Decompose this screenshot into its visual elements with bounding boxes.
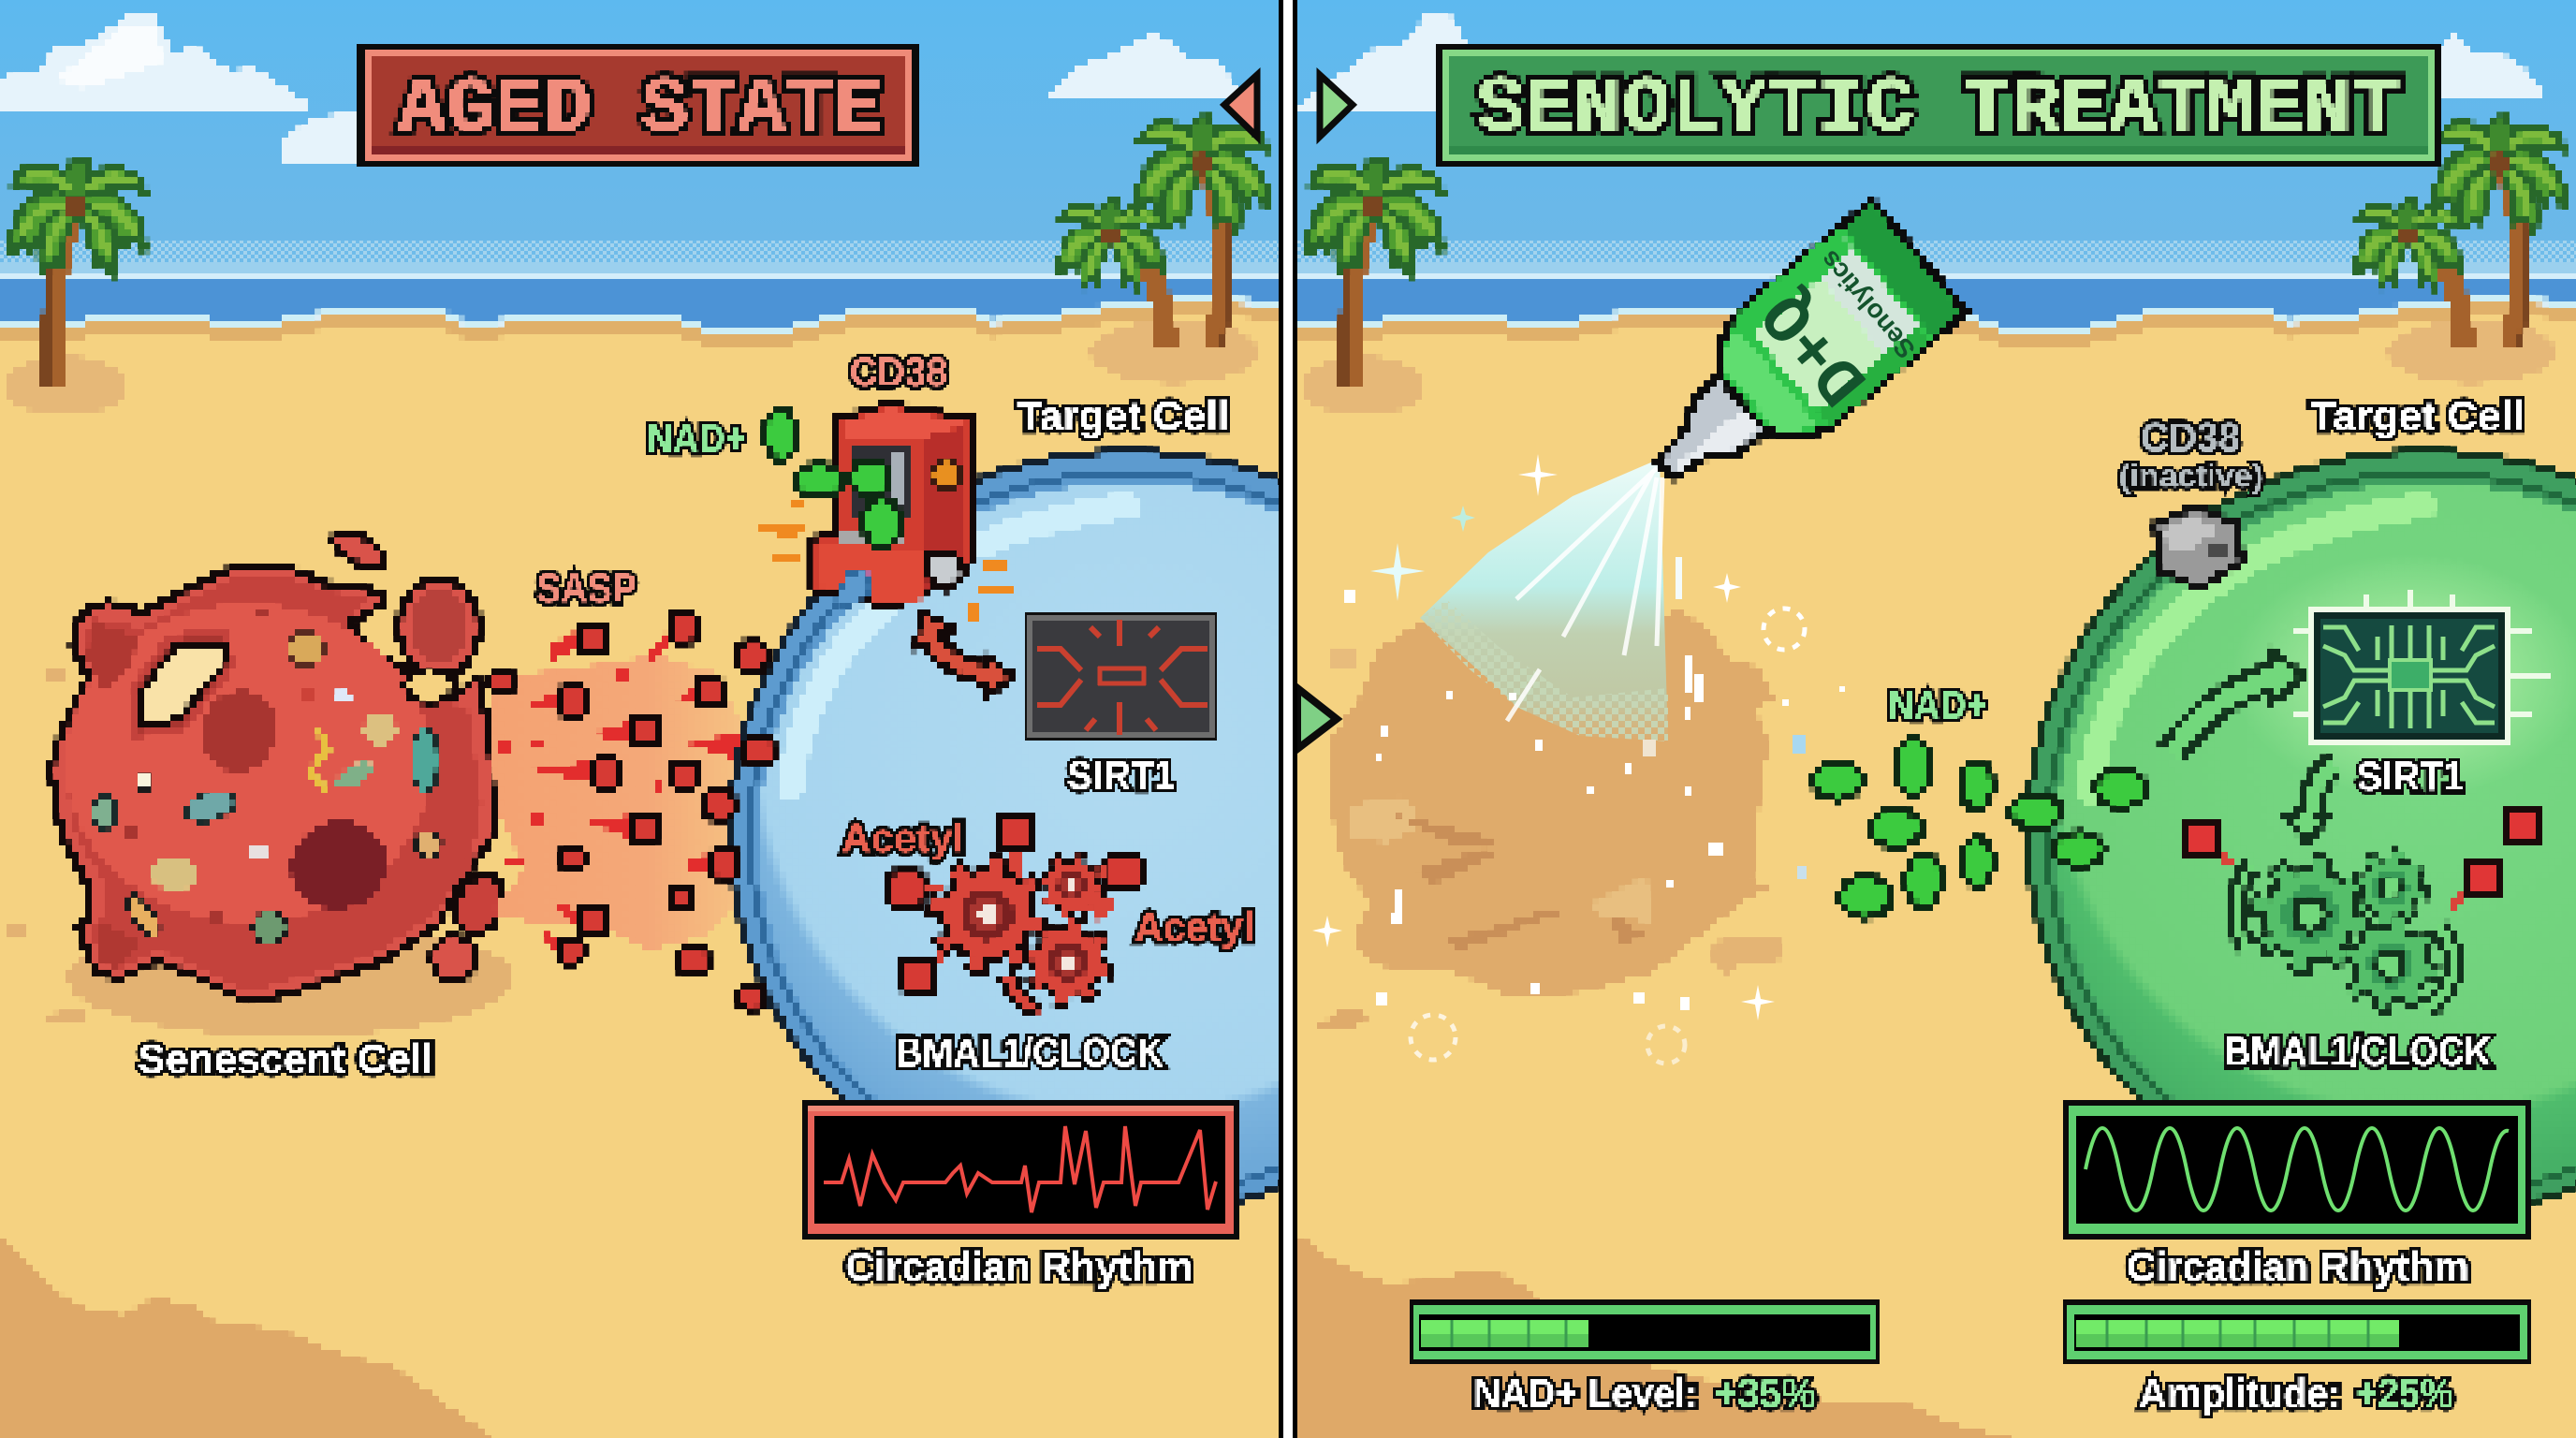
activation arrows: [2172, 653, 2335, 843]
damaged BMAL1/CLOCK gears: [890, 816, 1141, 1011]
title: aged state: AGED STATE: [398, 66, 883, 154]
dissolved senescent cell residue: [1310, 606, 1780, 1030]
panel divider: [1279, 0, 1297, 1438]
title: aged state: [357, 44, 919, 167]
beach background: [1297, 0, 2576, 1438]
label: Acetyl right: Acetyl: [1134, 904, 1254, 950]
target cell: healthy: [2027, 451, 2576, 1215]
arrow: right pointer: [1320, 75, 1353, 137]
circadian rhythm monitor: restored: [2063, 1100, 2531, 1240]
label: Target Cell: Target Cell: [2310, 393, 2525, 439]
text labels: senolytic treatment: [1473, 393, 2525, 1416]
label: Circadian Rhythm: Circadian Rhythm: [2127, 1244, 2469, 1290]
label: BMAL1/CLOCK: BMAL1/CLOCK: [2224, 1029, 2491, 1075]
clouds: [1297, 16, 2544, 112]
label: SIRT1: SIRT1: [2357, 754, 2464, 800]
SASP cloud and particles: [491, 629, 740, 950]
arrow: left pointer: [1224, 75, 1257, 137]
label: Senescent Cell: Senescent Cell: [138, 1036, 433, 1082]
NAD+ gems: [1813, 740, 2146, 917]
NAD+ level progress bar: [1410, 1299, 1880, 1364]
SIRT1 chip: active: [2232, 554, 2576, 798]
clouds: [0, 16, 1259, 161]
green NAD+ gems in machine: [765, 409, 900, 547]
spray cone: [1420, 459, 1668, 741]
label: CD38: CD38: [850, 349, 947, 395]
curved double arrow: [916, 611, 1014, 697]
CD38 vending machine: [812, 404, 971, 609]
bottle: D+Q senolytics: Senolytics: [1814, 245, 1921, 364]
sparkle rings: [1411, 609, 1805, 1064]
circadian rhythm monitor: disrupted: [802, 1100, 1239, 1240]
bottle: D+Q senolytics: D+Q: [1748, 276, 1884, 418]
beach background: [0, 0, 1279, 413]
SIRT1 chip: damaged: [1025, 612, 1217, 741]
bottle: D+Q senolytics: [1618, 200, 1966, 525]
SASP particle squares: [490, 614, 773, 1009]
sparkles: [1312, 454, 1845, 1020]
label: NAD+: NAD+: [647, 416, 746, 462]
label: SASP: SASP: [536, 565, 637, 611]
healthy BMAL1/CLOCK gears: [2187, 807, 2538, 1009]
label: Target Cell: Target Cell: [1017, 393, 1229, 439]
label: Amplitude: Amplitude:: [2139, 1371, 2341, 1416]
sand dune: [0, 1236, 505, 1438]
senescent cell: [6, 524, 513, 1036]
label: CD38 inactive: CD38: [2141, 415, 2240, 461]
panel: aged state: [0, 0, 1279, 1438]
title: senolytic treatment: [1436, 44, 2441, 167]
inactive CD38 rock: [2155, 506, 2242, 588]
amplitude progress bar: [2063, 1299, 2531, 1364]
orange sparks: [758, 500, 1014, 622]
label: inactive: (inactive): [2119, 459, 2263, 494]
label: NAD+ Level: NAD+ Level:: [1473, 1371, 1698, 1416]
label: BMAL1/CLOCK: BMAL1/CLOCK: [896, 1030, 1164, 1076]
value: +35%: +35%: [1715, 1371, 1816, 1416]
sand dune: [1297, 1234, 2022, 1438]
label: NAD+: NAD+: [1888, 682, 1987, 728]
title: senolytic treatment: SENOLYTIC TREATMENT: [1476, 66, 2401, 154]
arrow: treatment pointer: [1297, 688, 1337, 749]
text labels: aged state: [138, 349, 1254, 1290]
label: Circadian Rhythm: Circadian Rhythm: [845, 1244, 1193, 1290]
panel: senolytic treatment: [1297, 0, 2576, 1438]
target cell: aged: [727, 446, 1279, 1206]
label: SIRT1: SIRT1: [1067, 753, 1175, 799]
label: Acetyl left: Acetyl: [842, 815, 964, 861]
value: +25%: +25%: [2356, 1371, 2453, 1416]
